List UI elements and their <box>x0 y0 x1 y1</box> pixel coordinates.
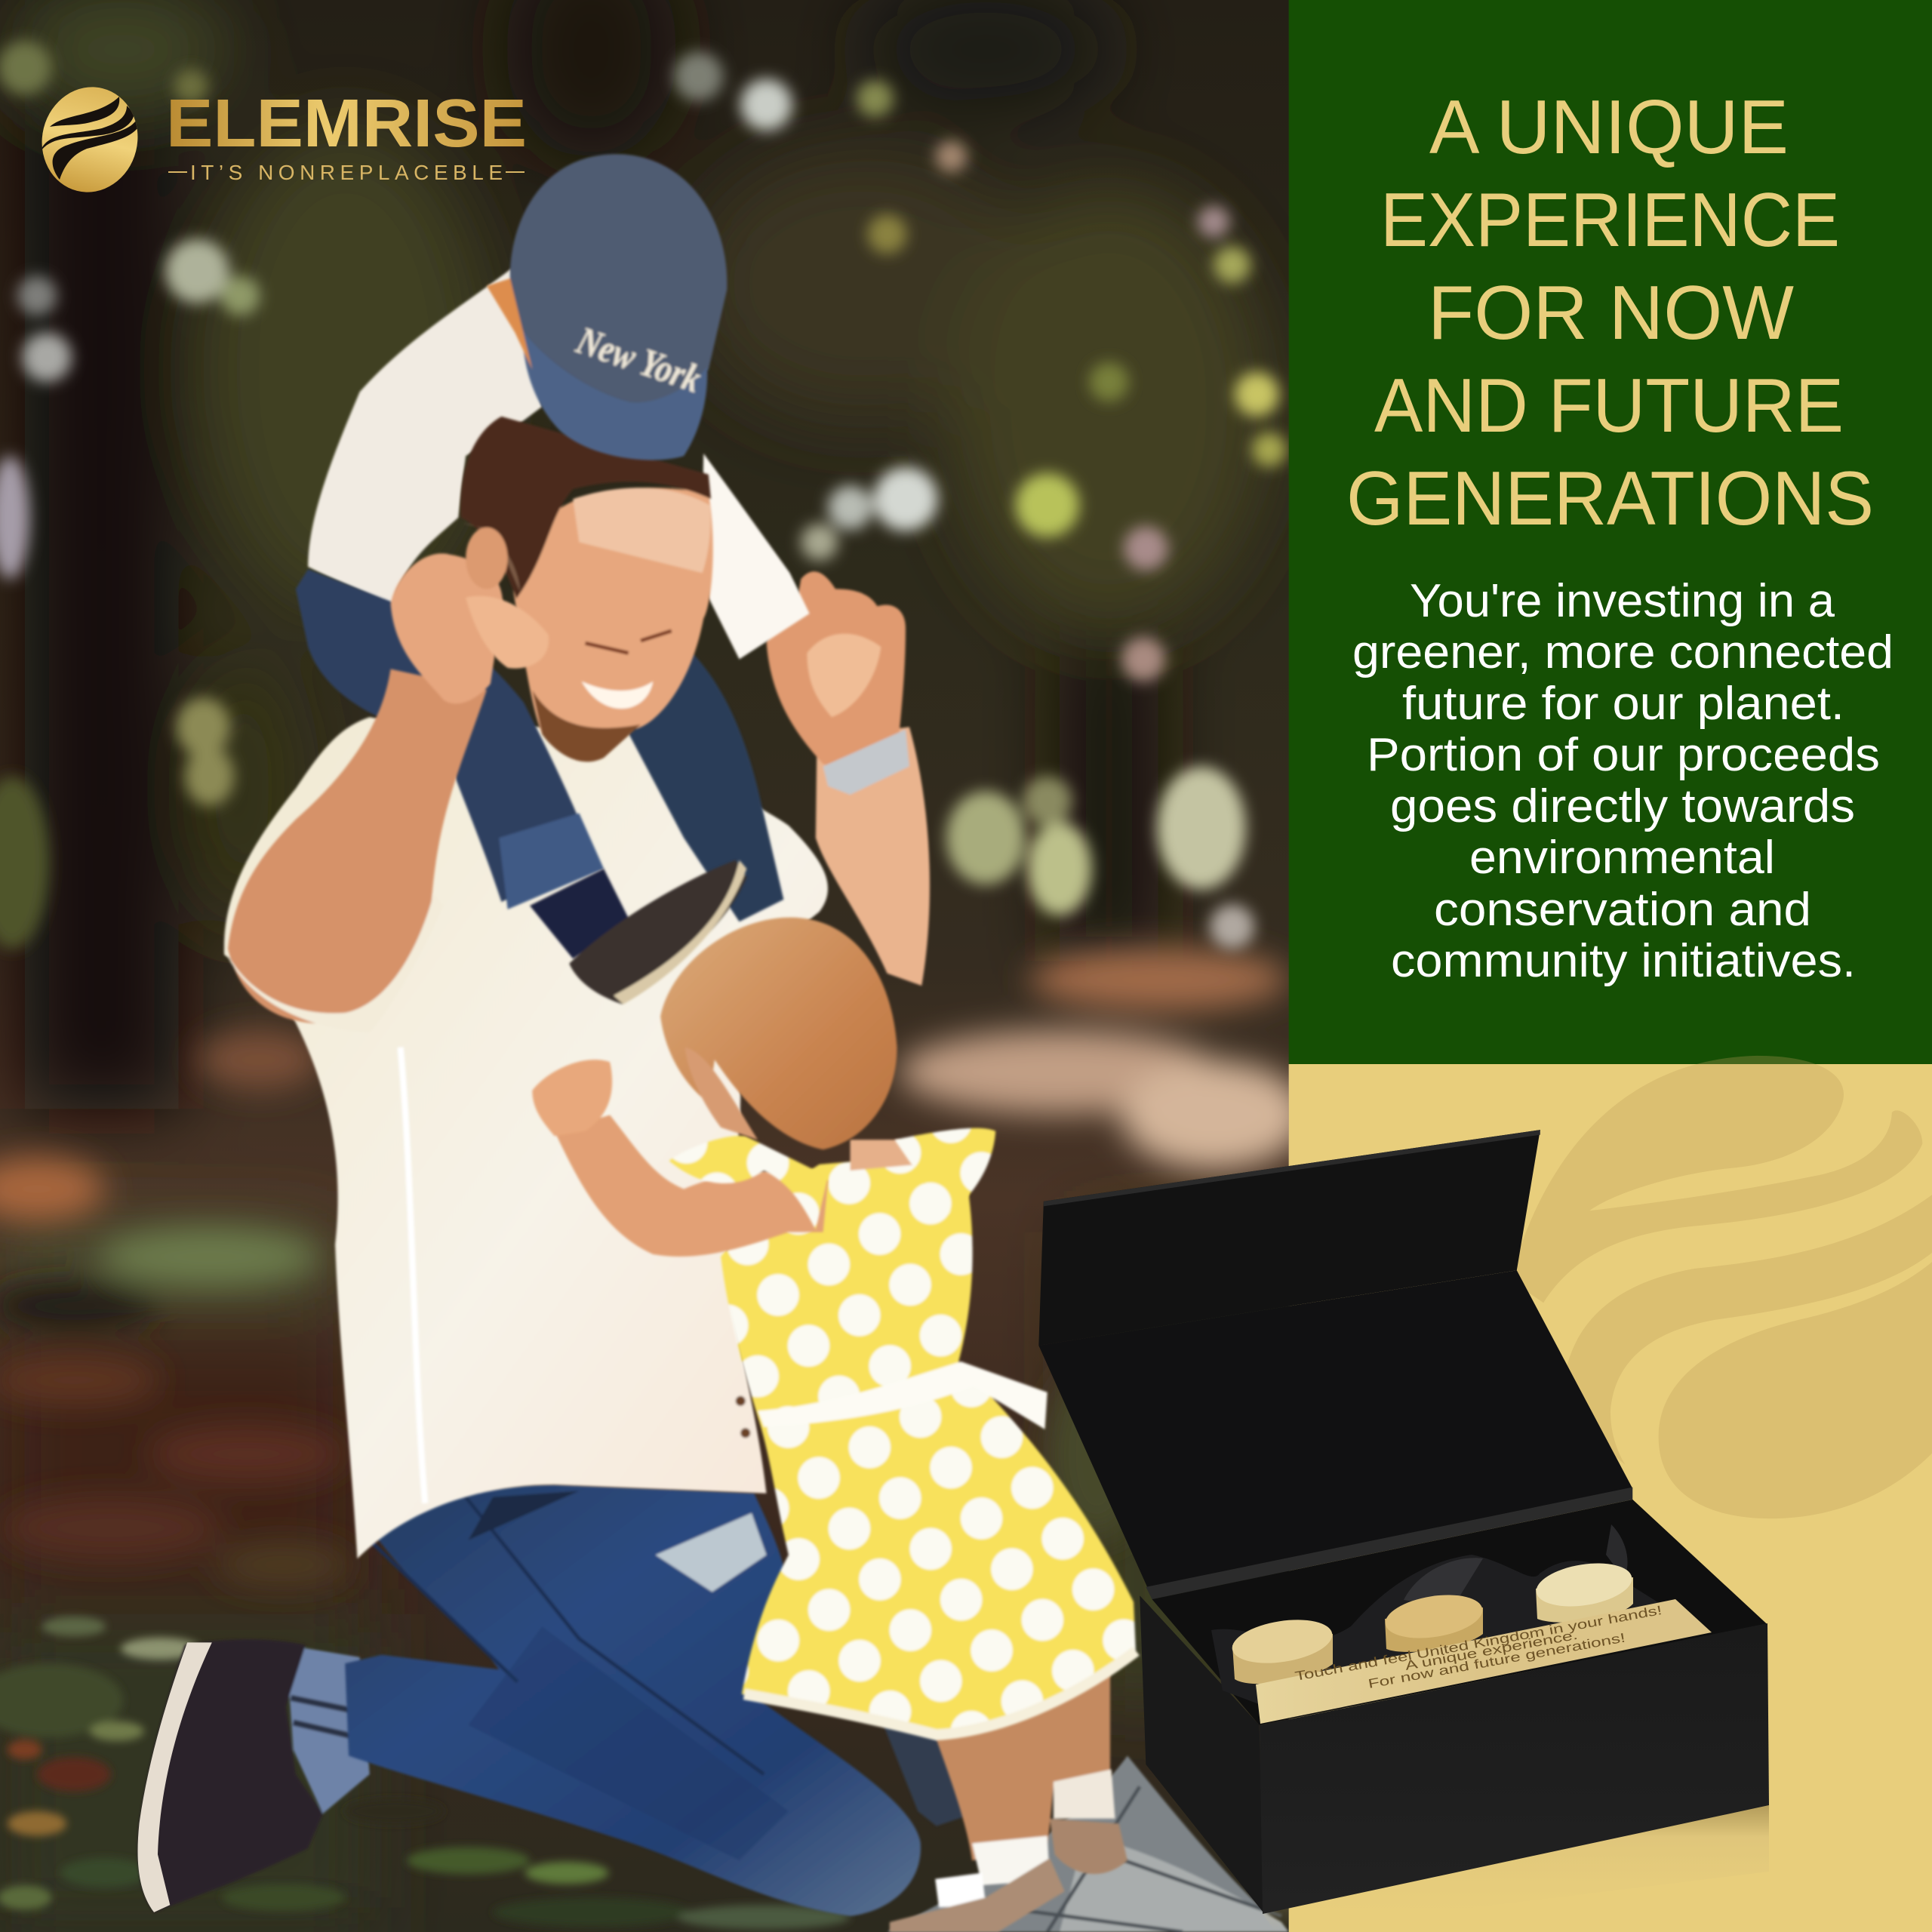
figure: father's shirt <box>224 717 828 1558</box>
figure: man's face and hair <box>460 417 713 761</box>
box lid <box>1038 1130 1767 1914</box>
heading <box>1346 85 1874 541</box>
tagline left rule <box>168 171 187 173</box>
figure: father's far knee <box>884 1727 963 1826</box>
figure: girl's legs and shoes <box>890 1645 1128 1932</box>
body line 6: environmental <box>1469 832 1775 884</box>
figure: boy's jeans <box>296 569 783 921</box>
text: tagline: IT’S NONREPLACEBLE <box>190 161 503 184</box>
photo: father and children in forest <box>0 0 1331 1932</box>
plaque engraved text line 2: A unique experience. <box>1404 1628 1579 1673</box>
blanket under girl's feet <box>888 1756 1289 1932</box>
bamboo cylinder 3 <box>1534 1557 1635 1623</box>
background: cream panel <box>1288 1057 1932 1932</box>
figure: boy's shirt <box>308 269 810 659</box>
box floor reflection <box>1263 1805 1769 1932</box>
satin lining <box>1211 1524 1660 1713</box>
logo mark <box>31 77 149 202</box>
figure: boy's hat <box>487 154 727 460</box>
icon: boot sole <box>137 1642 212 1912</box>
heading line 4: AND FUTURE <box>1374 364 1844 448</box>
bamboo cylinder 2 <box>1383 1589 1485 1652</box>
body text block <box>1352 575 1894 987</box>
body line 2: greener, more connected <box>1352 626 1894 678</box>
heading line 1: A UNIQUE <box>1429 85 1789 170</box>
figure: girl's hair <box>660 918 897 1149</box>
plaque engraved text line 1: Touch and feel United Kingdom in your hands! <box>1294 1603 1663 1684</box>
tagline right rule <box>506 171 525 173</box>
figure: father's jeans <box>345 1484 921 1916</box>
figure: girl's dress sleeves <box>669 1128 995 1229</box>
figure: boy's hands <box>466 596 881 717</box>
figure: father's left forearm and hand <box>767 571 930 986</box>
body line 3: future for our planet. <box>1402 678 1844 730</box>
logo: wordmark <box>166 86 527 184</box>
product: black gift box with bamboo contents <box>1038 1130 1769 1932</box>
figure: boy's sock and shoe <box>530 860 746 1004</box>
bamboo cylinder 1 <box>1229 1614 1335 1684</box>
box front panel <box>1260 1623 1769 1914</box>
body line 1: You're investing in a <box>1410 575 1835 627</box>
watermark: brand swoosh on cream panel <box>1510 1056 1932 1518</box>
body line 5: goes directly towards <box>1390 780 1855 832</box>
panel: green message panel <box>1288 0 1932 1064</box>
text: ELEMRISE: ELEMRISE <box>166 86 527 162</box>
body line 4: Portion of our proceeds <box>1367 729 1880 781</box>
figure: father's back leg and shoe <box>137 1639 370 1912</box>
heading line 3: FOR NOW <box>1428 271 1794 355</box>
heading line 2: EXPERIENCE <box>1380 178 1840 263</box>
icon: father's boot <box>137 1639 323 1912</box>
bamboo plaque <box>1256 1599 1712 1724</box>
heading line 5: GENERATIONS <box>1346 457 1874 541</box>
figure: father's raised right arm and sleeve <box>224 553 503 1032</box>
text: hat embroidery: New York <box>571 318 706 401</box>
foreground foliage <box>0 1617 851 1930</box>
body line 8: community initiatives. <box>1391 935 1856 987</box>
plaque engraved text line 3: For now and future generations! <box>1367 1630 1626 1691</box>
figure: girl's polka dot dress <box>721 1140 1136 1737</box>
figure: girl's arm and hand <box>532 1060 828 1257</box>
body line 7: conservation and <box>1434 884 1811 936</box>
forest background with bokeh <box>0 0 1331 1932</box>
